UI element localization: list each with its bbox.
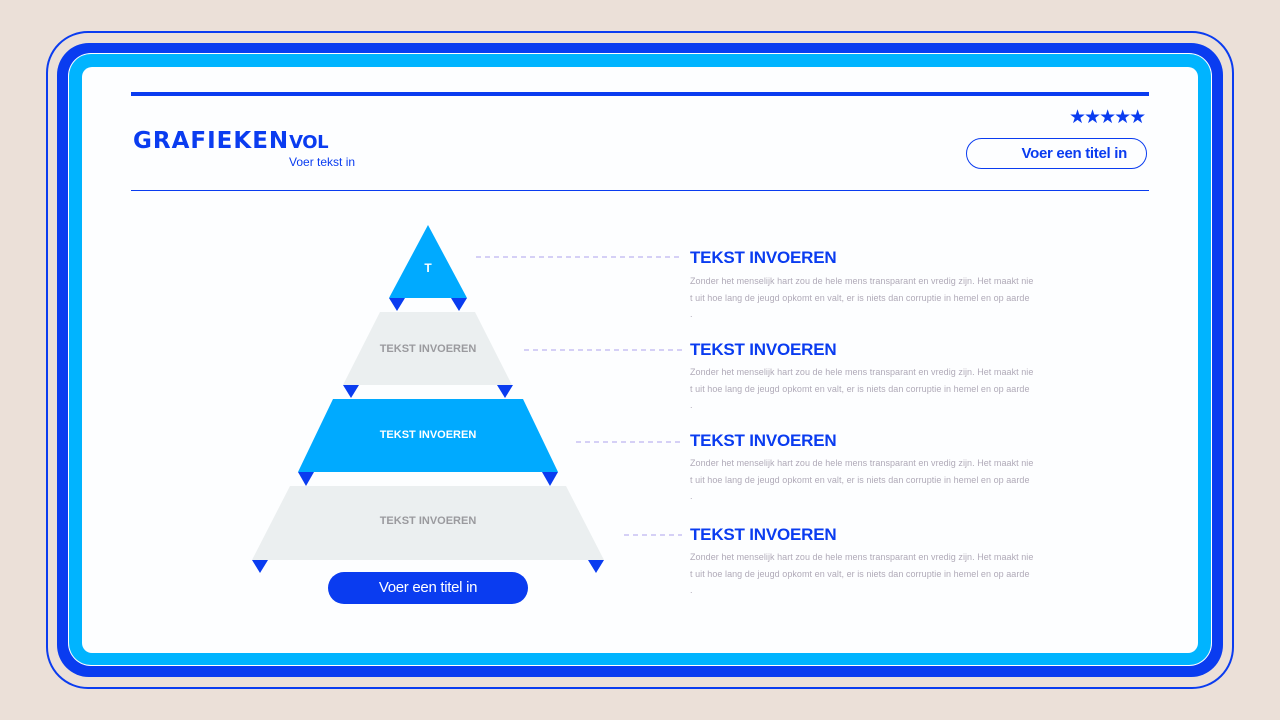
panel: main white card [82, 67, 1198, 653]
button: title outline: Voer een titel in [1022, 145, 1127, 162]
text: t uit hoe lang de jeugd opkomt en valt, er is niets dan corruptie in hemel en op aarde [690, 384, 1030, 394]
text: t uit hoe lang de jeugd opkomt en valt, er is niets dan corruptie in hemel en op aarde [690, 474, 1030, 484]
button: bottom title [328, 572, 528, 604]
title: logo: GRAFIEKENVOL [133, 128, 328, 154]
text: Zonder het menselijk hart zou de hele mens transparant en vredig zijn. Het maakt nie [690, 458, 1033, 468]
button: bottom title: Voer een titel in [379, 579, 477, 596]
text: Zonder het menselijk hart zou de hele mens transparant en vredig zijn. Het maakt nie [690, 552, 1033, 562]
text block 4: TEKST INVOEREN [690, 525, 836, 544]
text: Zonder het menselijk hart zou de hele mens transparant en vredig zijn. Het maakt nie [690, 367, 1033, 377]
text: t uit hoe lang de jeugd opkomt en valt, er is niets dan corruptie in hemel en op aarde [690, 568, 1030, 578]
icon: stars: ★★★★★ [1069, 107, 1144, 128]
text: Zonder het menselijk hart zou de hele mens transparant en vredig zijn. Het maakt nie [690, 276, 1033, 286]
text: . [690, 309, 693, 319]
chart: pyramid: TEKST INVOEREN [380, 515, 476, 527]
text: . [690, 585, 693, 595]
text block 2: TEKST INVOEREN [690, 340, 836, 359]
text: . [690, 400, 693, 410]
subtitle: Voer tekst in [289, 155, 355, 169]
text block 1: TEKST INVOEREN [690, 248, 836, 267]
text block 3: TEKST INVOEREN [690, 431, 836, 450]
text: t uit hoe lang de jeugd opkomt en valt, er is niets dan corruptie in hemel en op aarde [690, 292, 1030, 302]
button: title outline [966, 138, 1147, 169]
chart: pyramid: TEKST INVOEREN [380, 429, 476, 441]
chart: pyramid: T [424, 261, 432, 275]
chart: pyramid: TEKST INVOEREN [380, 343, 476, 355]
text: . [690, 491, 693, 501]
